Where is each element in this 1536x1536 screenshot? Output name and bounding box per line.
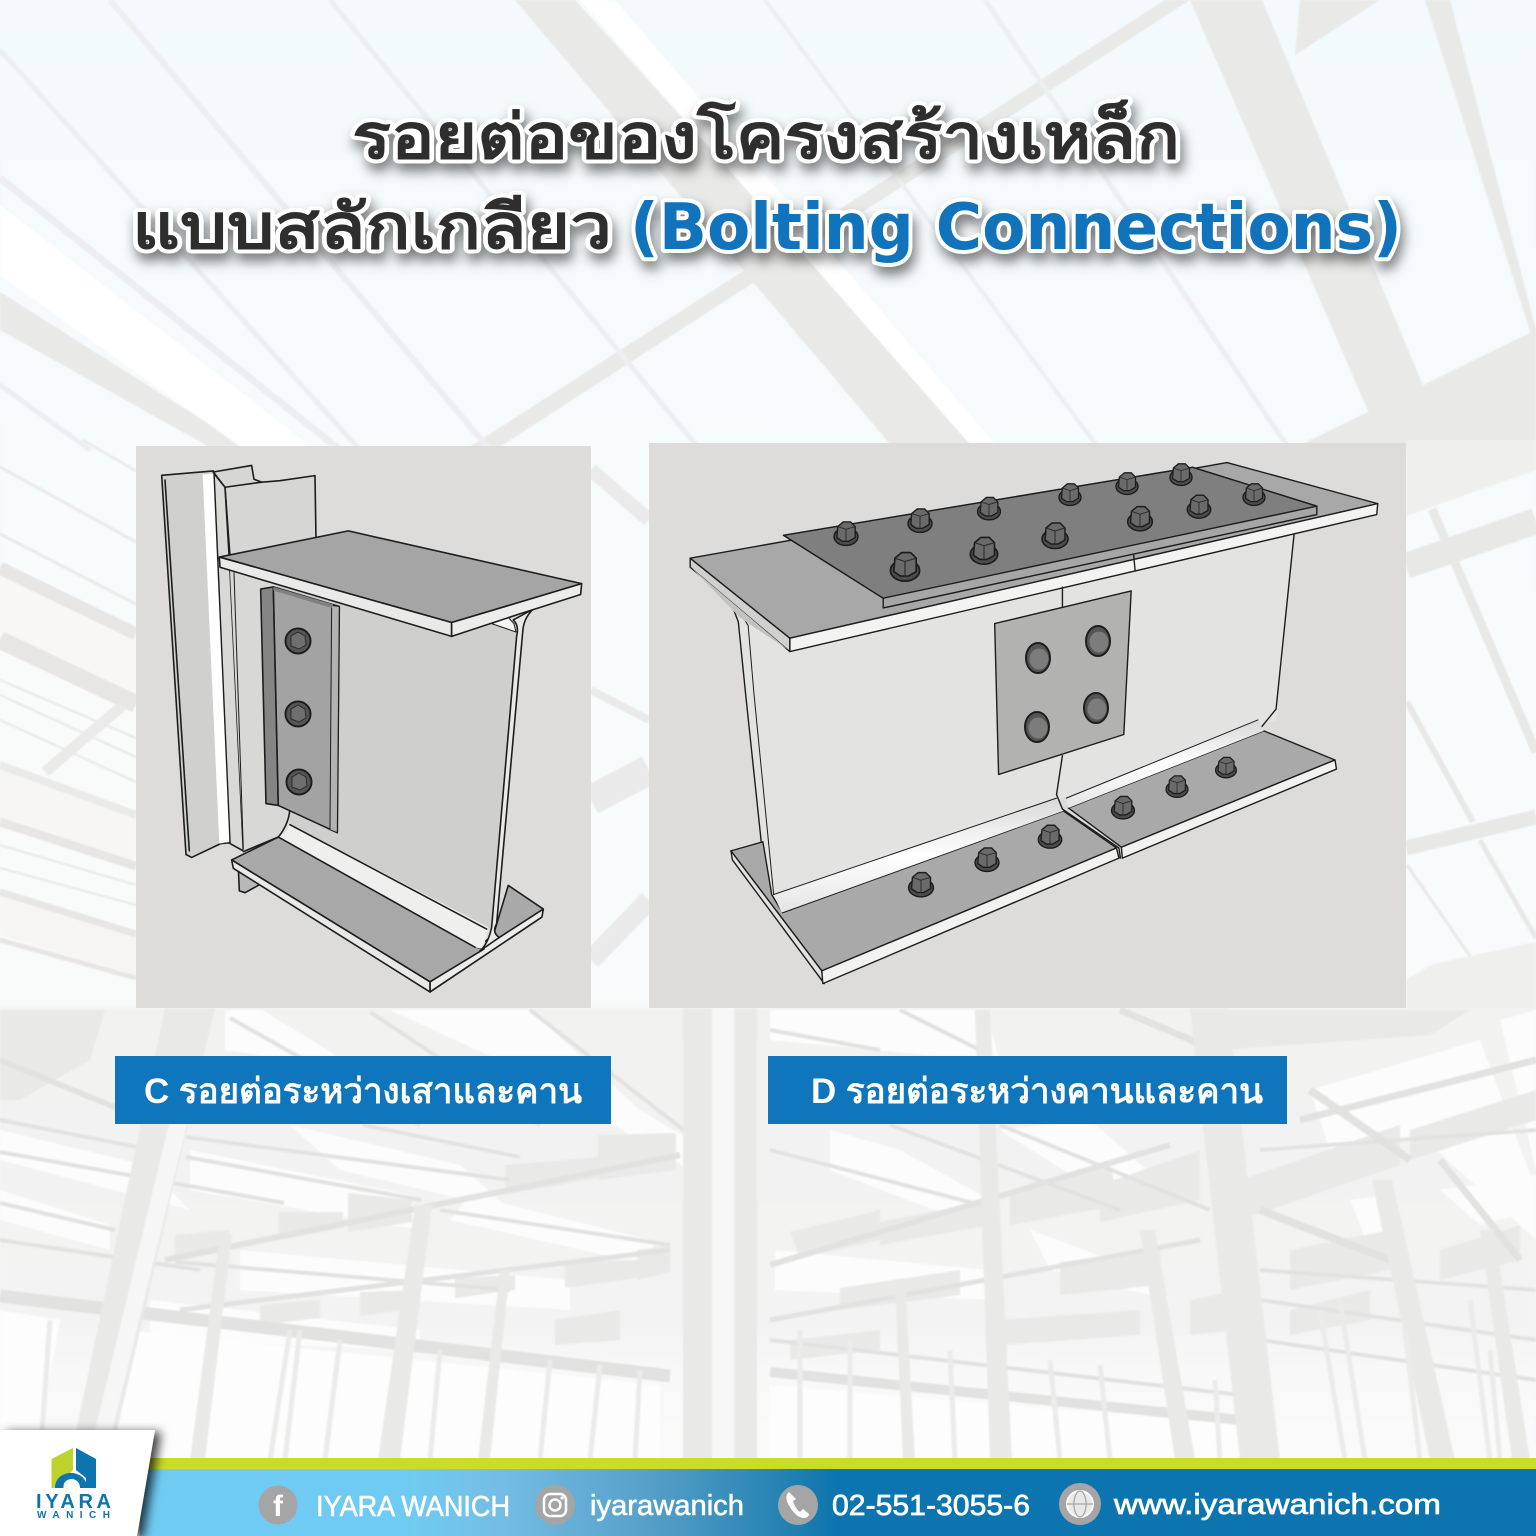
splice plate	[261, 587, 339, 833]
lower windows	[0, 1310, 1240, 1460]
bolts C	[286, 628, 312, 794]
label: C	[115, 1056, 611, 1124]
contact: website	[1059, 1483, 1441, 1525]
footer bar	[140, 1458, 1536, 1536]
top flange	[219, 531, 582, 636]
bright skylight panes	[0, 1010, 1536, 1350]
side strip right	[1406, 440, 1536, 516]
title: แบบสลักเกลียว	[132, 193, 612, 262]
side strip left	[0, 570, 136, 700]
title: (Bolting Connections)	[630, 191, 1402, 265]
contact: instagram	[535, 1485, 744, 1525]
logo mark	[52, 1448, 96, 1488]
label: D	[768, 1056, 1287, 1124]
web splice plate	[995, 591, 1131, 775]
title: รอยต่อของโครงสร้างเหล็ก	[352, 99, 1180, 172]
panel C: column-to-beam diagram	[136, 446, 591, 1008]
contact: phone	[778, 1485, 1030, 1525]
contact: facebook: IYARA WANICH	[316, 1491, 510, 1523]
contact: phone: 02-551-3055-6	[832, 1490, 1030, 1522]
panel D: beam-to-beam diagram	[649, 443, 1406, 1008]
beam boxes	[0, 1010, 1536, 1360]
columns	[70, 1008, 1530, 1460]
label: C: C รอยต่อระหว่างเสาและคาน	[144, 1072, 582, 1111]
top splice plate	[783, 467, 1317, 608]
bottom flange	[731, 720, 1336, 984]
logo panel	[0, 1430, 155, 1536]
label: D: D รอยต่อระหว่างคานและคาน	[811, 1072, 1263, 1111]
beam web	[738, 533, 1294, 894]
web right edge	[480, 609, 533, 951]
contact: facebook: f	[273, 1490, 284, 1523]
top flange	[690, 463, 1378, 652]
title	[132, 99, 1402, 265]
gap between panels	[591, 470, 649, 960]
beam web	[277, 578, 520, 929]
bottom flange	[232, 804, 543, 992]
beam lines	[0, 1010, 1536, 1420]
column	[162, 465, 316, 893]
bolts D	[834, 464, 1265, 897]
contact: facebook	[258, 1486, 510, 1524]
logo wordmark: WANICH	[37, 1510, 110, 1521]
lower structure base	[0, 1008, 1536, 1460]
logo wordmark: IYARA	[36, 1491, 111, 1513]
contact: instagram: iyarawanich	[590, 1490, 744, 1522]
contact: website: www.iyarawanich.com	[1113, 1489, 1441, 1521]
